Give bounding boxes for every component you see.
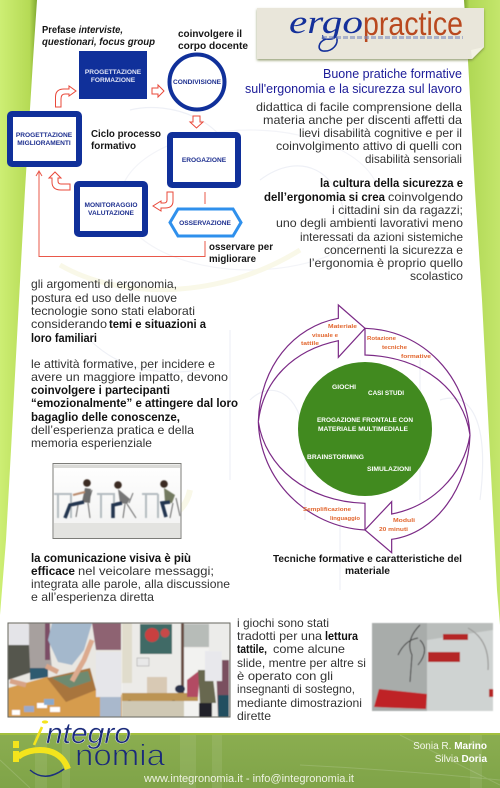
background watermark: [60, 108, 483, 590]
text block: giochi: lettura: [325, 629, 358, 643]
circle: condivisione: CONDIVISIONE: [173, 79, 222, 86]
photo: students playing tactile game: [8, 623, 122, 717]
text block: giochi: come alcune: [273, 642, 345, 656]
text block: giochi: i giochi sono stati: [237, 616, 329, 630]
figure 3: [142, 480, 180, 518]
text block: comunicazione visiva: efficace: [31, 564, 75, 578]
arrow label: materiale: Materiale: [328, 324, 357, 330]
figure 2: [97, 481, 136, 518]
navy arc: [30, 769, 64, 776]
text block: argomenti: gli argomenti di ergonomia,: [31, 277, 177, 291]
box: erogazione: [170, 135, 238, 185]
word: integro: ntegro: [46, 718, 131, 750]
text block: argomenti: considerando: [31, 317, 107, 331]
text block: didattica: disabilità sensoriali: [365, 152, 462, 166]
text block: giochi: [237, 616, 366, 723]
subtitle: Buone pratiche formative: [323, 67, 462, 81]
label: osservare per migliorare: [209, 241, 273, 265]
circle: condivisione: [170, 54, 224, 110]
arrow: erogazione to monitoraggio: [153, 192, 173, 211]
text block: attivita formative: [31, 357, 238, 450]
arrow: formazione to condivisione: [152, 85, 164, 97]
box: progettazione miglioramenti: PROGETTAZIONE: [16, 132, 73, 139]
box: monitoraggio valutazione: [77, 184, 145, 234]
central green circle: CASI STUDI: [368, 390, 404, 397]
text block: cultura della sicurezza: la cultura della sicurezza e: [320, 176, 463, 190]
text block: attivita formative: avere un maggiore impatto, devono: [31, 370, 228, 384]
text block: attivita formative: bagaglio delle conoscenze,: [31, 410, 180, 424]
text block: comunicazione visiva: integrata alle parole, alla discussione: [31, 577, 230, 591]
arrow label: rotazione: [367, 336, 431, 360]
title banner: ergopractice: [257, 5, 484, 59]
heading: coinvolgere il corpo docente: coinvolgere il: [178, 28, 242, 40]
logo word: ergo: ergo: [289, 5, 363, 41]
box: erogazione: EROGAZIONE: [182, 157, 227, 164]
arrow label: semplificazione: linguaggio: [330, 516, 361, 522]
heading: prefase: questionari, focus group: [42, 36, 156, 48]
text block: cultura della sicurezza: l’ergonomia è proprio quello: [309, 256, 463, 270]
text block: comunicazione visiva: nel veicolare messaggi;: [78, 564, 214, 578]
arrow label: materiale: tattile: [301, 341, 319, 347]
caption: tecniche formative: materiale: [345, 565, 390, 577]
label: ciclo processo formativo: [91, 128, 161, 152]
label: osservare per migliorare: osservare per: [209, 241, 273, 253]
text block: didattica: didattica di facile comprensione della: [256, 100, 462, 114]
text block: didattica: [256, 100, 462, 166]
text block: cultura della sicurezza: i cittadini sin da ragazzi;: [332, 203, 463, 217]
text block: argomenti: postura ed uso delle nuove: [31, 291, 177, 305]
arrow label: semplificazione: Semplificazione: [303, 507, 351, 513]
yellow arc symbol: [13, 741, 19, 748]
central green circle: SIMULAZIONI: [367, 466, 411, 473]
subtitle: sull'ergonomia e la sicurezza sul lavoro: [245, 82, 462, 96]
logo: integronomia: [13, 718, 166, 776]
label: ciclo processo formativo: formativo: [91, 140, 136, 152]
central green circle: MATERIALE MULTIMEDIALE: [318, 426, 408, 433]
text block: argomenti: loro familiari: [31, 331, 97, 345]
text block: giochi: slide, mentre per altre si: [237, 656, 366, 670]
label: ciclo processo formativo: Ciclo processo: [91, 128, 161, 140]
text block: attivita formative: coinvolgere i partecipanti: [31, 383, 170, 397]
authors: [413, 741, 487, 765]
text block: cultura della sicurezza: interessati da azioni sistemiche: [300, 230, 463, 244]
heading: prefase: Prefase interviste,: [42, 24, 123, 36]
right green side band: [464, 0, 500, 625]
text block: giochi: è operato con gli: [237, 669, 333, 683]
text block: cultura della sicurezza: concernenti la sicurezza e: [324, 243, 463, 257]
text block: attivita formative: le attività formative, per incidere e: [31, 357, 215, 371]
circular diagram: tecniche formative: [258, 305, 470, 553]
arrow: condivisione to erogazione: [190, 116, 203, 128]
heading: coinvolgere il corpo docente: [178, 28, 248, 52]
text block: cultura della sicurezza: uno degli ambienti lavorativi meno: [276, 216, 463, 230]
logo word: practice: practice: [363, 5, 463, 42]
word: nomia: nomia: [75, 738, 166, 772]
box: progettazione formazione: [79, 51, 147, 99]
arrow label: materiale: visuale e: [312, 333, 338, 339]
text block: argomenti: temi e situazioni a: [109, 317, 206, 331]
hexagon: osservazione: OSSERVAZIONE: [179, 220, 231, 227]
arrow label: moduli: Moduli: [393, 518, 416, 524]
box: progettazione formazione: FORMAZIONE: [91, 77, 136, 84]
caption: tecniche formative: Tecniche formative e caratteristiche del: [273, 553, 462, 565]
ring of arrows: [258, 305, 470, 553]
arrow label: moduli: [379, 518, 416, 533]
footer band: [0, 733, 500, 788]
text block: cultura della sicurezza: [264, 176, 463, 283]
box: progettazione formazione: PROGETTAZIONE: [85, 69, 142, 76]
arrow: miglioramenti to formazione: [56, 86, 76, 107]
label: osservare per migliorare: migliorare: [209, 253, 256, 265]
image: three seated postures at desks: [53, 464, 181, 538]
arrow label: semplificazione: [303, 507, 361, 522]
figure 1: [54, 479, 92, 518]
heading: prefase: [42, 24, 156, 48]
arrow label: rotazione: Rotazione: [367, 336, 396, 342]
arrow label: moduli: 20 minuti: [379, 527, 409, 533]
arrow: osservazione feedback to miglioramenti: [36, 171, 205, 256]
arrow label: rotazione: tecniche: [382, 345, 407, 351]
text block: giochi: tradotti per una: [237, 629, 322, 643]
text block: argomenti: [31, 277, 206, 345]
text block: cultura della sicurezza: scolastico: [410, 269, 463, 283]
text block: giochi: mediante dimostrazioni: [237, 696, 362, 710]
central green circle: BRAINSTORMING: [307, 454, 364, 461]
arrow: monitoraggio to miglioramenti: [49, 172, 70, 190]
text block: attivita formative: dell’esperienza pratica e della: [31, 423, 194, 437]
text block: argomenti: tecnologie sono stati elaborati: [31, 304, 195, 318]
text block: cultura della sicurezza: coinvolgendo: [388, 190, 463, 204]
heading: coinvolgere il corpo docente: corpo docente: [178, 40, 248, 52]
photo frame: [8, 623, 230, 717]
text block: comunicazione visiva: [31, 551, 230, 604]
text block: didattica: coinvolgimento attivo di quelli con: [276, 139, 462, 153]
box: progettazione miglioramenti: MIGLIORAMENTI: [17, 140, 71, 147]
box: progettazione miglioramenti: [10, 114, 79, 164]
box: monitoraggio valutazione: MONITORAGGIO: [84, 202, 138, 209]
photo: tactile slides: [372, 623, 493, 711]
authors: Sonia R. Marino: [413, 741, 487, 752]
central green circle: EROGAZIONE FRONTALE CON: [317, 417, 413, 424]
text block: attivita formative: “emozionalmente” e attingere dal loro: [31, 396, 238, 410]
text block: didattica: lievi disabilità cognitive e per il: [299, 126, 462, 140]
central green circle: GIOCHI: [332, 384, 356, 391]
scribble under logo: [322, 36, 463, 39]
text block: giochi: dirette: [237, 709, 271, 723]
arrow label: materiale: [301, 324, 357, 347]
left green side band: [0, 0, 37, 615]
text block: didattica: materia anche per discenti affetti da: [263, 113, 462, 127]
flow diagram: training cycle: [10, 51, 241, 256]
text block: comunicazione visiva: e all’esperienza diretta: [31, 590, 154, 604]
subtitle: [245, 67, 462, 96]
box: monitoraggio valutazione: VALUTAZIONE: [88, 210, 135, 217]
folded corner: [471, 47, 484, 59]
text block: giochi: insegnanti di sostegno,: [237, 682, 355, 696]
logo g swash: [319, 36, 337, 51]
text block: attivita formative: memoria esperienziale: [31, 436, 152, 450]
arrow label: rotazione: formative: [401, 354, 431, 360]
text block: cultura della sicurezza: dell’ergonomia si crea: [264, 190, 385, 204]
central green circle: [298, 362, 432, 496]
hexagon: osservazione: [170, 209, 241, 236]
caption: tecniche formative: [273, 553, 462, 577]
yellow i: [34, 727, 42, 745]
arrow: erogazione to osservazione: [204, 192, 206, 204]
website and email: www.integronomia.it - info@integronomia.it: [143, 773, 354, 785]
text block: comunicazione visiva: la comunicazione visiva è più: [31, 551, 191, 565]
text block: giochi: tattile,: [237, 642, 267, 656]
authors: Silvia Doria: [435, 754, 487, 765]
photo: classroom: [122, 623, 230, 717]
